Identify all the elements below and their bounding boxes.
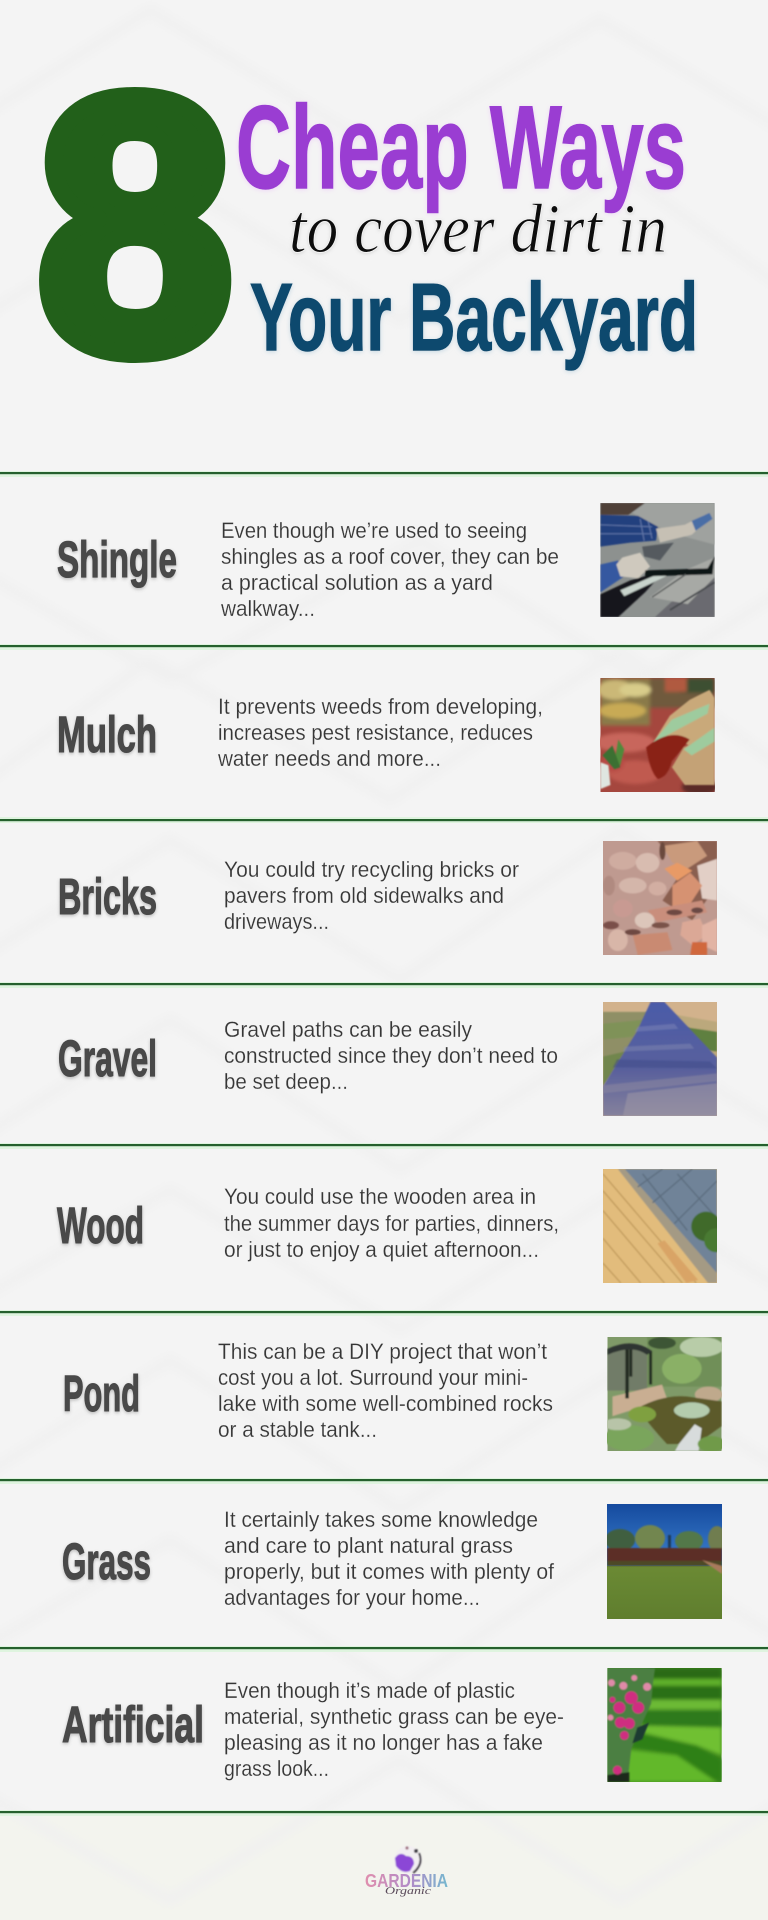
text block: Artificial: pleasing as it no longer has a fake: [224, 1730, 543, 1755]
text block: Wood: or just to enjoy a quiet afternoon...: [224, 1237, 539, 1262]
text block: Shingle: [220, 518, 559, 621]
heading: Pond: Pond: [63, 1365, 140, 1422]
photo: hands laying roof shingles: [600, 503, 715, 617]
text block: Shingle: Even though we’re used to seeing: [221, 518, 527, 543]
text block: Artificial: [224, 1678, 564, 1781]
logo script: Organic: [385, 1886, 432, 1897]
text block: Grass: It certainly takes some knowledge: [224, 1507, 538, 1532]
panel: Gravel: [58, 1002, 717, 1116]
text block: Bricks: You could try recycling bricks or: [224, 857, 519, 882]
heading: Wood: Wood: [57, 1197, 144, 1254]
text block: Shingle: walkway...: [220, 596, 315, 621]
text block: Bricks: driveways...: [224, 909, 329, 934]
panel: Artificial: [62, 1668, 722, 1782]
panel: Shingle: [57, 503, 714, 621]
heading: Mulch: Mulch: [57, 706, 157, 763]
heading: Grass: Grass: [62, 1533, 151, 1590]
row dividers: [0, 471, 768, 1816]
text block: Gravel: be set deep...: [224, 1069, 348, 1094]
icon: purple globe: [394, 1846, 422, 1874]
text block: Grass: [224, 1507, 555, 1610]
heading: Artificial: Artificial: [62, 1696, 204, 1753]
title line: to cover dirt in: to cover dirt in: [289, 191, 667, 268]
heading: Shingle: Shingle: [57, 531, 177, 588]
photo: gloved hands holding red mulch: [600, 678, 715, 792]
panel: Mulch: [57, 678, 717, 795]
text block: Grass: and care to plant natural grass: [224, 1533, 513, 1558]
text block: Grass: advantages for your home...: [224, 1585, 480, 1610]
text block: Pond: [218, 1339, 553, 1442]
panel: Pond: [63, 1337, 725, 1452]
panel: Grass: [62, 1504, 726, 1619]
panel: Wood: [57, 1169, 728, 1283]
text block: Bricks: [224, 857, 519, 934]
photo: green lawn under blue sky: [607, 1504, 722, 1619]
text block: Wood: You could use the wooden area in: [224, 1184, 536, 1209]
text block: Pond: cost you a lot. Surround your mini-: [218, 1365, 528, 1390]
text block: Mulch: It prevents weeds from developing,: [218, 694, 543, 719]
text block: Grass: properly, but it comes with plenty of: [224, 1559, 555, 1584]
title: [236, 82, 698, 371]
text block: Artificial: grass look...: [224, 1756, 329, 1781]
text block: Gravel: [224, 1017, 558, 1094]
heading: Gravel: Gravel: [58, 1030, 157, 1087]
logo: Gardenia Organic: [365, 1846, 448, 1897]
photo: gravel garden path: [603, 1002, 717, 1116]
text block: Wood: the summer days for parties, dinners,: [224, 1211, 559, 1236]
text block: Mulch: increases pest resistance, reduces: [218, 720, 533, 745]
text block: Mulch: [217, 694, 543, 771]
logo wordmark: GARDENIA: [365, 1871, 448, 1891]
text block: Bricks: pavers from old sidewalks and: [224, 883, 504, 908]
text block: Pond: This can be a DIY project that won’t: [218, 1339, 547, 1364]
text block: Artificial: Even though it’s made of plastic: [224, 1678, 515, 1703]
text block: Gravel: constructed since they don’t need to: [224, 1043, 558, 1068]
big number 8: 8: [37, 21, 233, 427]
text block: Wood: [224, 1184, 559, 1262]
text block: Shingle: a practical solution as a yard: [221, 570, 493, 595]
photo: artificial grass steps with pink flowers: [607, 1668, 722, 1782]
heading: Bricks: Bricks: [58, 868, 157, 925]
photo: wooden deck beside pavers: [603, 1169, 717, 1283]
text block: Artificial: material, synthetic grass can be eye-: [224, 1704, 564, 1729]
photo: backyard pond with gazebo: [607, 1337, 722, 1451]
text block: Pond: lake with some well-combined rocks: [218, 1391, 553, 1416]
panel: Bricks: [58, 841, 717, 955]
photo: pile of broken bricks: [603, 841, 717, 955]
text block: Gravel: Gravel paths can be easily: [224, 1017, 472, 1042]
text block: Shingle: shingles as a roof cover, they can be: [221, 544, 559, 569]
text block: Pond: or a stable tank...: [218, 1417, 377, 1442]
text block: Mulch: water needs and more...: [217, 746, 441, 771]
